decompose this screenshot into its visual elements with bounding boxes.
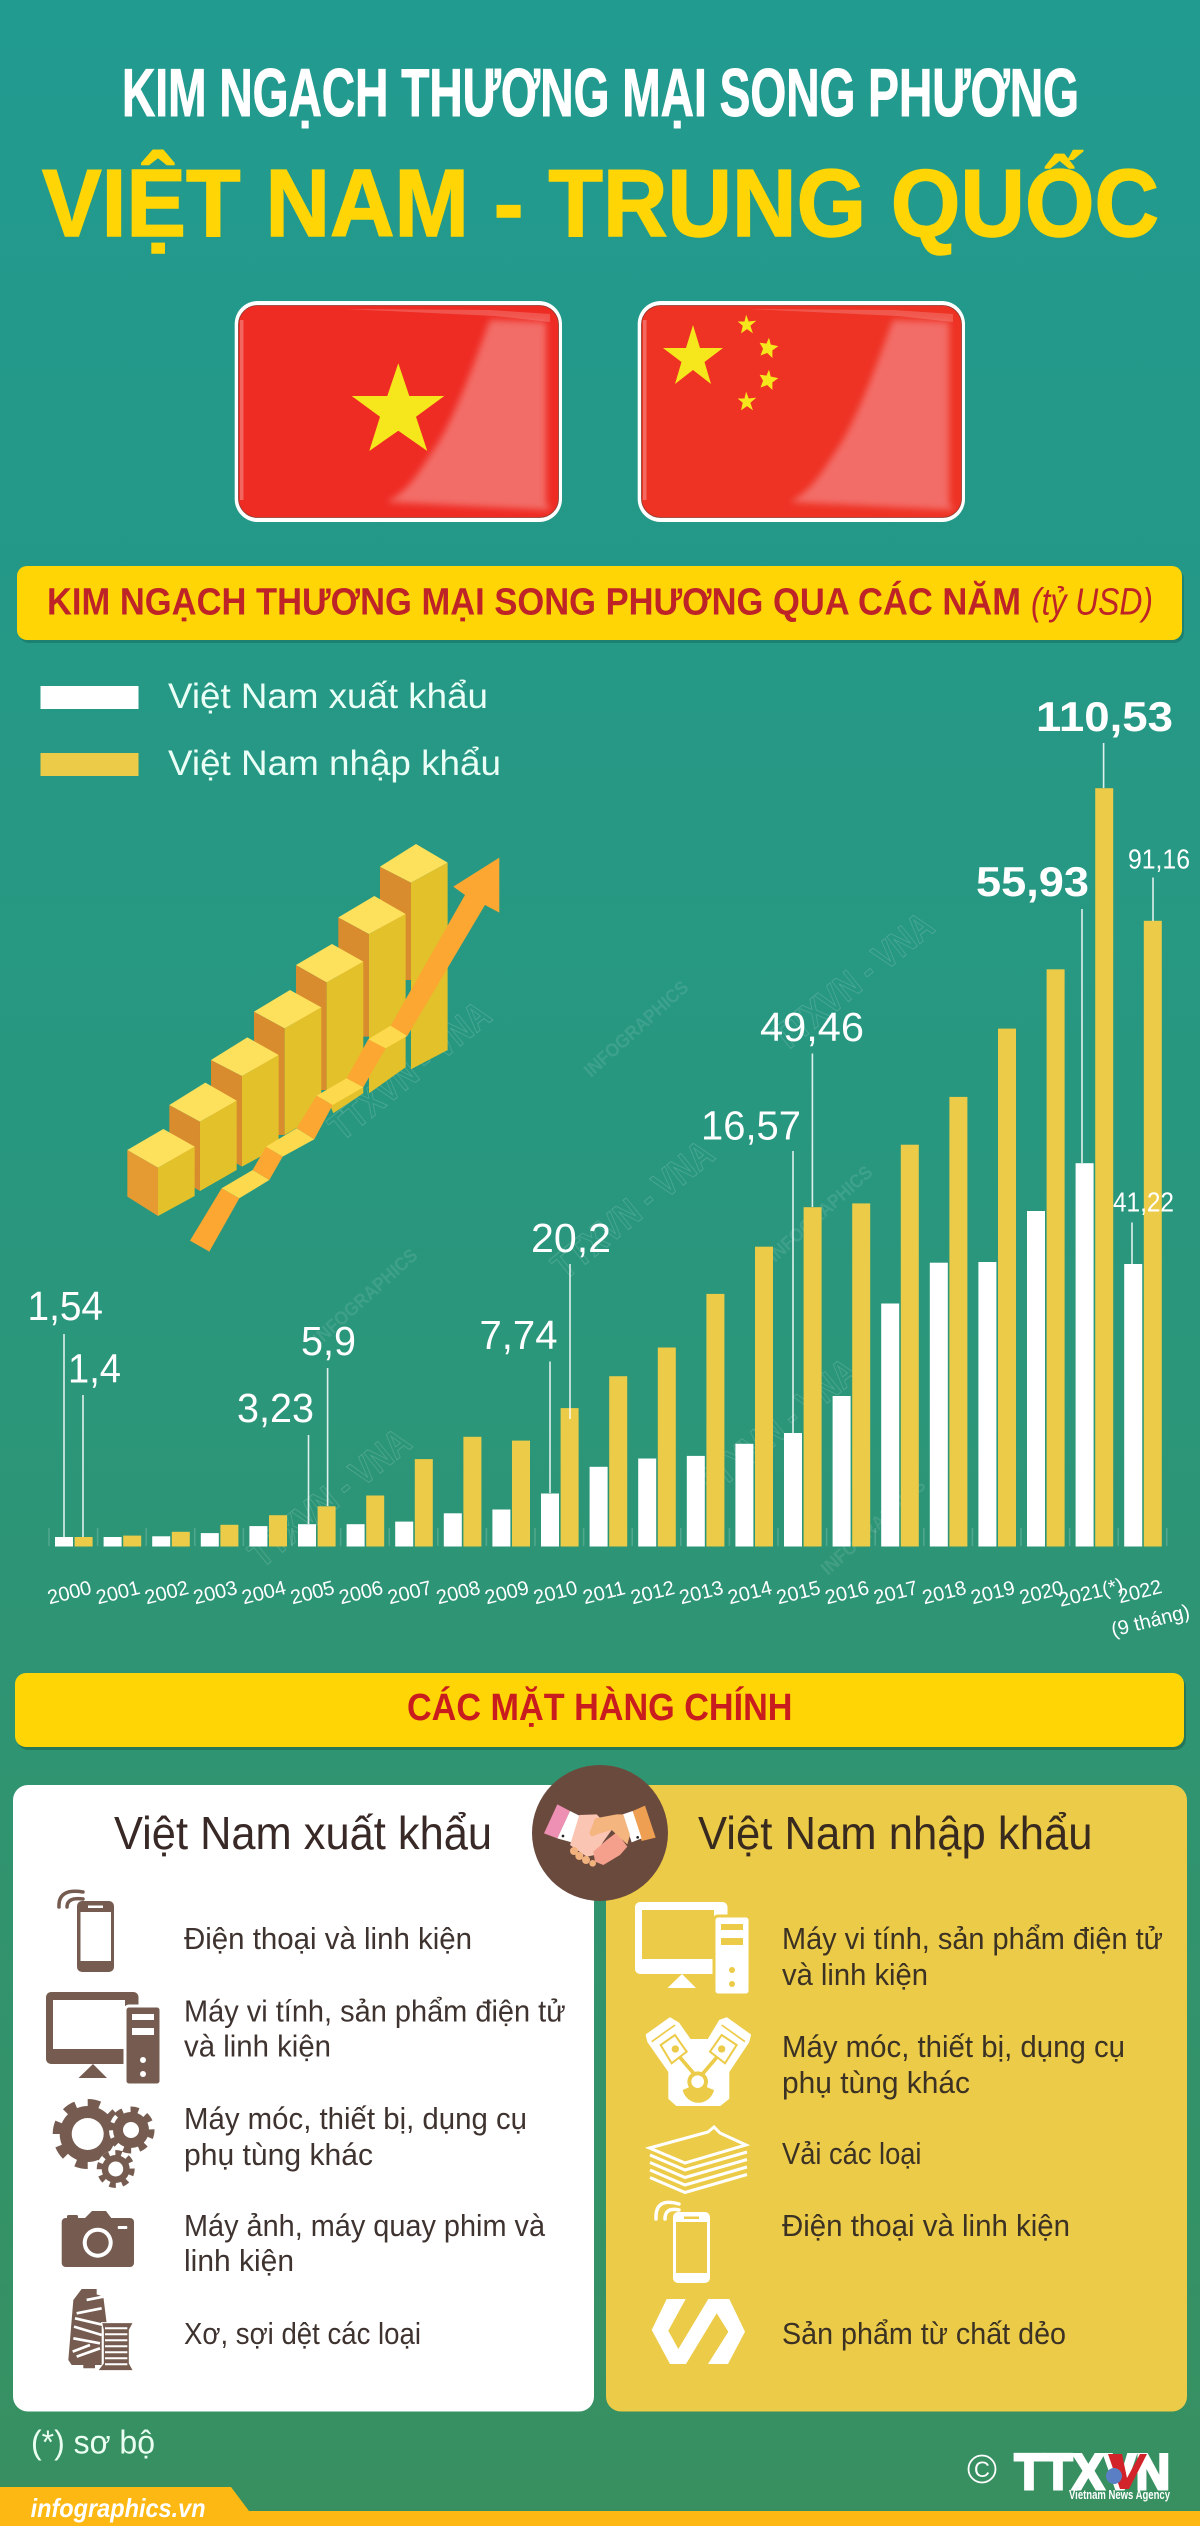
legend: import: Việt Nam nhập khẩu <box>168 744 501 783</box>
year labels: 2013 <box>677 1577 726 1609</box>
panel: Vietnam exports <box>13 1785 594 2412</box>
year labels: 2021(*) <box>1057 1575 1126 1612</box>
value labels: 5,9 <box>301 1318 356 1364</box>
footnote: (*) sơ bộ <box>31 2424 155 2460</box>
year labels: 2000 <box>45 1577 94 1609</box>
value labels: 55,93 <box>976 858 1089 905</box>
banner: trade by year: KIM NGẠCH THƯƠNG MẠI SONG PHƯƠNG QUA CÁC NĂM <box>47 580 1021 624</box>
watermarks: INFOGRAPHICS <box>764 1162 877 1267</box>
watermarks: INFOGRAPHICS <box>309 1245 422 1350</box>
watermarks: TTXVN - VNA <box>241 1421 419 1576</box>
legend: export: Việt Nam xuất khẩu <box>168 677 488 716</box>
value labels: 1,4 <box>68 1346 121 1392</box>
value labels: 20,2 <box>531 1215 611 1261</box>
icon: phone white <box>656 2202 710 2283</box>
item: machinery: phụ tùng khác <box>184 2137 373 2172</box>
item: machinery <box>184 2101 527 2172</box>
legend: import <box>40 744 501 783</box>
footer strip <box>0 2487 1200 2526</box>
icon: phone <box>59 1891 114 1972</box>
icon: camera <box>62 2211 134 2267</box>
year labels: 2020 <box>1017 1577 1066 1609</box>
value labels <box>28 693 1190 1431</box>
leader lines <box>64 743 1153 1537</box>
watermarks: TTXVN - VNA <box>764 905 942 1060</box>
watermarks: TTXVN - VNA <box>544 1133 722 1288</box>
item: computers <box>782 1921 1163 1992</box>
year labels <box>45 1575 1192 1642</box>
watermarks: INFOGRAPHICS <box>817 1475 930 1580</box>
panel: Vietnam imports <box>606 1785 1187 2412</box>
year labels: 2011 <box>581 1577 628 1609</box>
item: computers <box>184 1994 566 2064</box>
bar chart <box>28 693 1192 1642</box>
item: machinery: Máy móc, thiết bị, dụng cụ <box>184 2101 527 2136</box>
title <box>42 55 1159 257</box>
item: computers: và linh kiện <box>782 1957 928 1992</box>
item: fabric: Vải các loại <box>782 2136 922 2171</box>
item: phones: Điện thoại và linh kiện <box>782 2208 1070 2243</box>
year labels: 2010 <box>531 1577 580 1609</box>
value labels: 110,53 <box>1036 693 1173 740</box>
watermarks: INFOGRAPHICS <box>580 977 693 1082</box>
import bars <box>75 788 1162 1546</box>
logo: TTXVN: TTXVN <box>1014 2444 1170 2500</box>
value labels: 41,22 <box>1113 1187 1174 1218</box>
item: cameras <box>184 2208 546 2278</box>
icon: engine <box>647 2018 750 2105</box>
icon: thread spools <box>68 2289 133 2371</box>
logo: TTXVN: Vietnam News Agency <box>1069 2488 1170 2502</box>
item: machinery <box>782 2029 1125 2100</box>
year labels: 2005 <box>288 1577 337 1609</box>
value labels: 49,46 <box>760 1004 864 1050</box>
item: machinery: Máy móc, thiết bị, dụng cụ <box>782 2029 1125 2064</box>
item: phones: Điện thoại và linh kiện <box>184 1921 472 1956</box>
watermarks: TTXVN - VNA <box>688 1351 866 1506</box>
item: machinery: phụ tùng khác <box>782 2065 970 2100</box>
year labels: 2014 <box>726 1577 774 1609</box>
year labels: 2007 <box>385 1577 434 1609</box>
value labels: 16,57 <box>701 1103 801 1149</box>
banner: main goods <box>15 1673 1186 1750</box>
item: computers: Máy vi tính, sản phẩm điện tử <box>782 1921 1163 1956</box>
item: yarn: Xơ, sợi dệt các loại <box>184 2316 421 2351</box>
icon: computer <box>46 1992 161 2085</box>
value labels: 1,54 <box>28 1283 103 1329</box>
legend: export <box>40 677 488 716</box>
year labels: 2019 <box>969 1577 1017 1609</box>
year labels: 2002 <box>142 1577 191 1609</box>
banner: main goods: CÁC MẶT HÀNG CHÍNH <box>407 1685 792 1729</box>
footer strip: infographics.vn <box>31 2493 206 2523</box>
item: plastics: Sản phẩm từ chất dẻo <box>782 2316 1066 2351</box>
flag: China <box>638 301 965 522</box>
value labels: 7,74 <box>480 1312 558 1358</box>
copyright symbol <box>968 2456 996 2482</box>
year labels: 2008 <box>434 1577 483 1609</box>
watermarks <box>241 905 942 1580</box>
icon: stacked fabric <box>650 2127 747 2192</box>
item: cameras: Máy ảnh, máy quay phim và <box>184 2208 546 2243</box>
year labels: 2022 <box>1116 1576 1164 1608</box>
item: computers: Máy vi tính, sản phẩm điện tử <box>184 1994 566 2029</box>
icon: plastic <box>652 2299 745 2364</box>
export bars <box>55 1163 1142 1546</box>
year labels: 2009 <box>483 1577 531 1609</box>
year labels: (9 tháng) <box>1109 1601 1192 1642</box>
item: cameras: linh kiện <box>184 2243 294 2278</box>
watermarks: INFOGRAPHICS <box>268 928 381 1033</box>
year labels: 2012 <box>628 1577 677 1609</box>
banner: trade by year: (tỷ USD) <box>1031 582 1153 624</box>
item: computers: và linh kiện <box>184 2028 331 2064</box>
watermarks: TTXVN - VNA <box>321 994 499 1149</box>
panel heading: imports: Việt Nam nhập khẩu <box>698 1807 1092 1859</box>
value labels: 3,23 <box>237 1385 314 1431</box>
year labels: 2017 <box>871 1577 920 1609</box>
axis ticks <box>49 1528 1167 1546</box>
year labels: 2016 <box>823 1577 871 1609</box>
flag: Vietnam <box>235 301 562 522</box>
year labels: 2004 <box>240 1577 288 1609</box>
icon: gears <box>57 2103 153 2188</box>
panel heading: exports: Việt Nam xuất khẩu <box>114 1807 492 1859</box>
value labels: 91,16 <box>1128 844 1190 874</box>
icon: 3D gold bars with rising arrow <box>127 844 499 1252</box>
banner: trade by year <box>17 566 1184 643</box>
icon: handshake <box>532 1765 668 1901</box>
year labels: 2018 <box>920 1577 969 1609</box>
year labels: 2003 <box>191 1577 240 1609</box>
year labels: 2006 <box>337 1577 385 1609</box>
copyright symbol: C <box>974 2457 990 2482</box>
year labels: 2001 <box>94 1577 142 1609</box>
year labels: 2015 <box>774 1577 823 1609</box>
legend <box>40 677 501 783</box>
icon: computer white <box>635 1902 750 1995</box>
